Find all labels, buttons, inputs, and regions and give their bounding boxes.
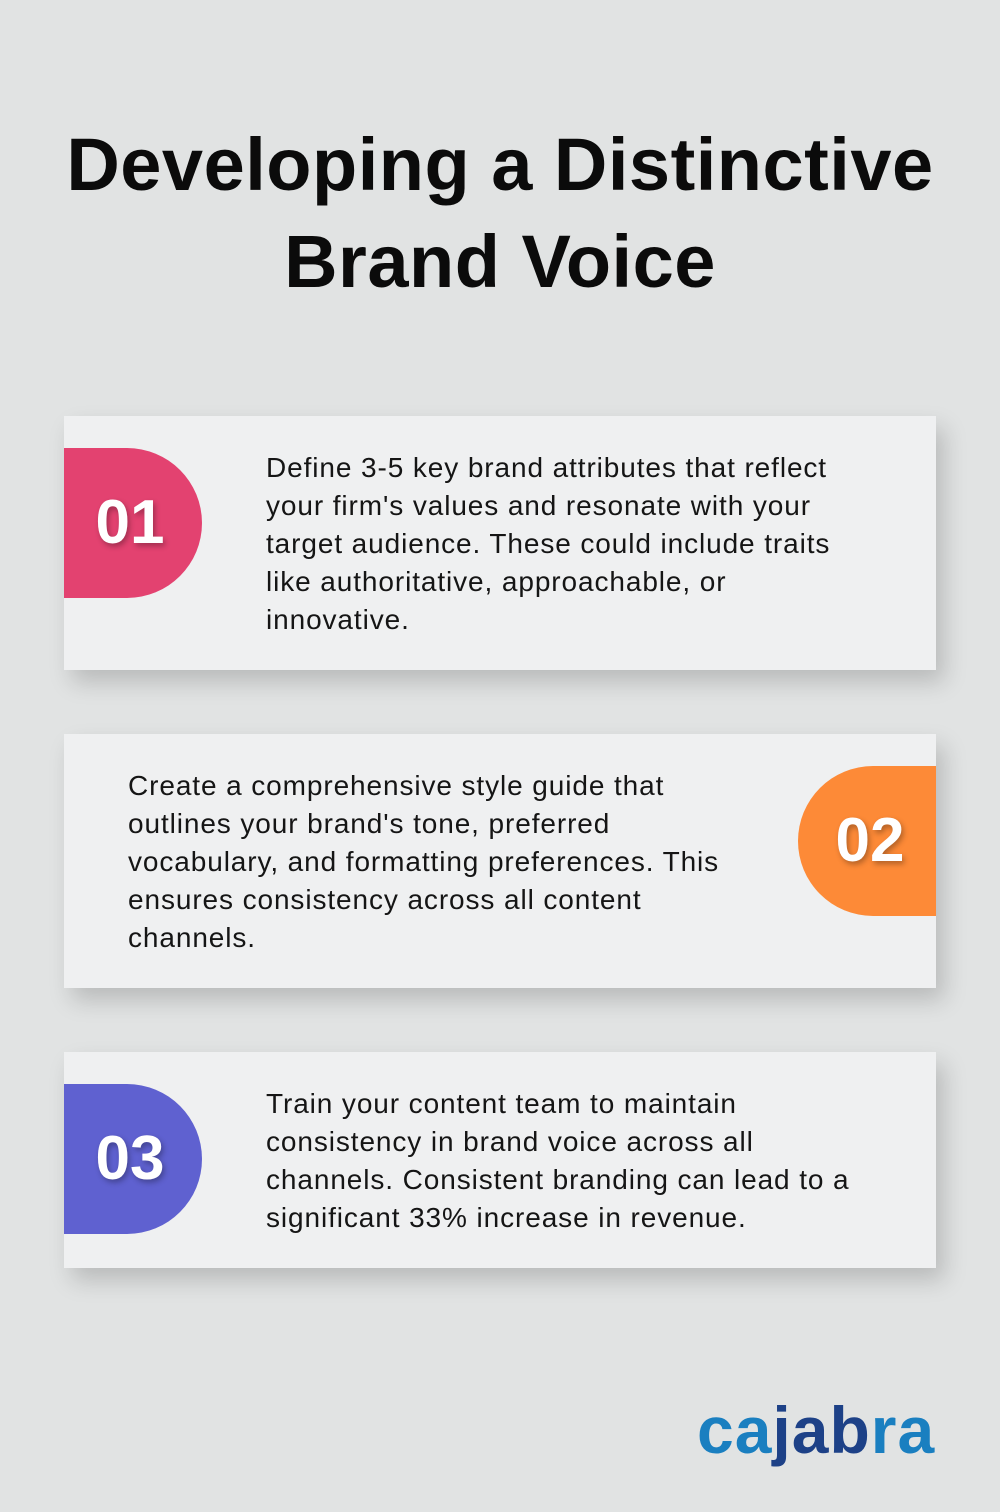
text: step 03: Train your content team to maintain xyxy=(266,1088,737,1119)
title xyxy=(66,123,934,303)
badge: 02: 02 xyxy=(836,806,904,875)
text: step 01: Define 3-5 key brand attributes that reflect xyxy=(266,452,827,483)
text: step 02: Create a comprehensive style guide that xyxy=(128,770,664,801)
text: step 01: innovative. xyxy=(266,604,410,635)
badge: 01: 01 xyxy=(96,488,164,557)
panel: step 03 xyxy=(64,1052,936,1268)
text: step 03: consistency in brand voice across all xyxy=(266,1126,754,1157)
panel: step 01 xyxy=(64,416,936,670)
text: step 01: target audience. These could include traits xyxy=(266,528,830,559)
badge: 02 xyxy=(798,766,936,916)
logo: cajabra xyxy=(697,1393,935,1467)
text: step 02 xyxy=(128,770,719,953)
text: step 02: vocabulary, and formatting preferences. This xyxy=(128,846,719,877)
text: step 02: outlines your brand's tone, preferred xyxy=(128,808,610,839)
panel: step 02 xyxy=(64,734,936,988)
text: step 02: channels. xyxy=(128,922,256,953)
text: step 03: significant 33% increase in revenue. xyxy=(266,1202,747,1233)
title: Brand Voice xyxy=(284,220,716,303)
text: step 03 xyxy=(266,1088,850,1233)
text: step 01: your firm's values and resonate with your xyxy=(266,490,811,521)
badge: 03: 03 xyxy=(96,1124,164,1193)
text: step 01 xyxy=(266,452,830,635)
badge: 01 xyxy=(64,448,202,598)
text: step 02: ensures consistency across all content xyxy=(128,884,642,915)
text: step 03: channels. Consistent branding can lead to a xyxy=(266,1164,850,1195)
title: Developing a Distinctive xyxy=(66,123,934,206)
badge: 03 xyxy=(64,1084,202,1234)
text: step 01: like authoritative, approachable, or xyxy=(266,566,726,597)
